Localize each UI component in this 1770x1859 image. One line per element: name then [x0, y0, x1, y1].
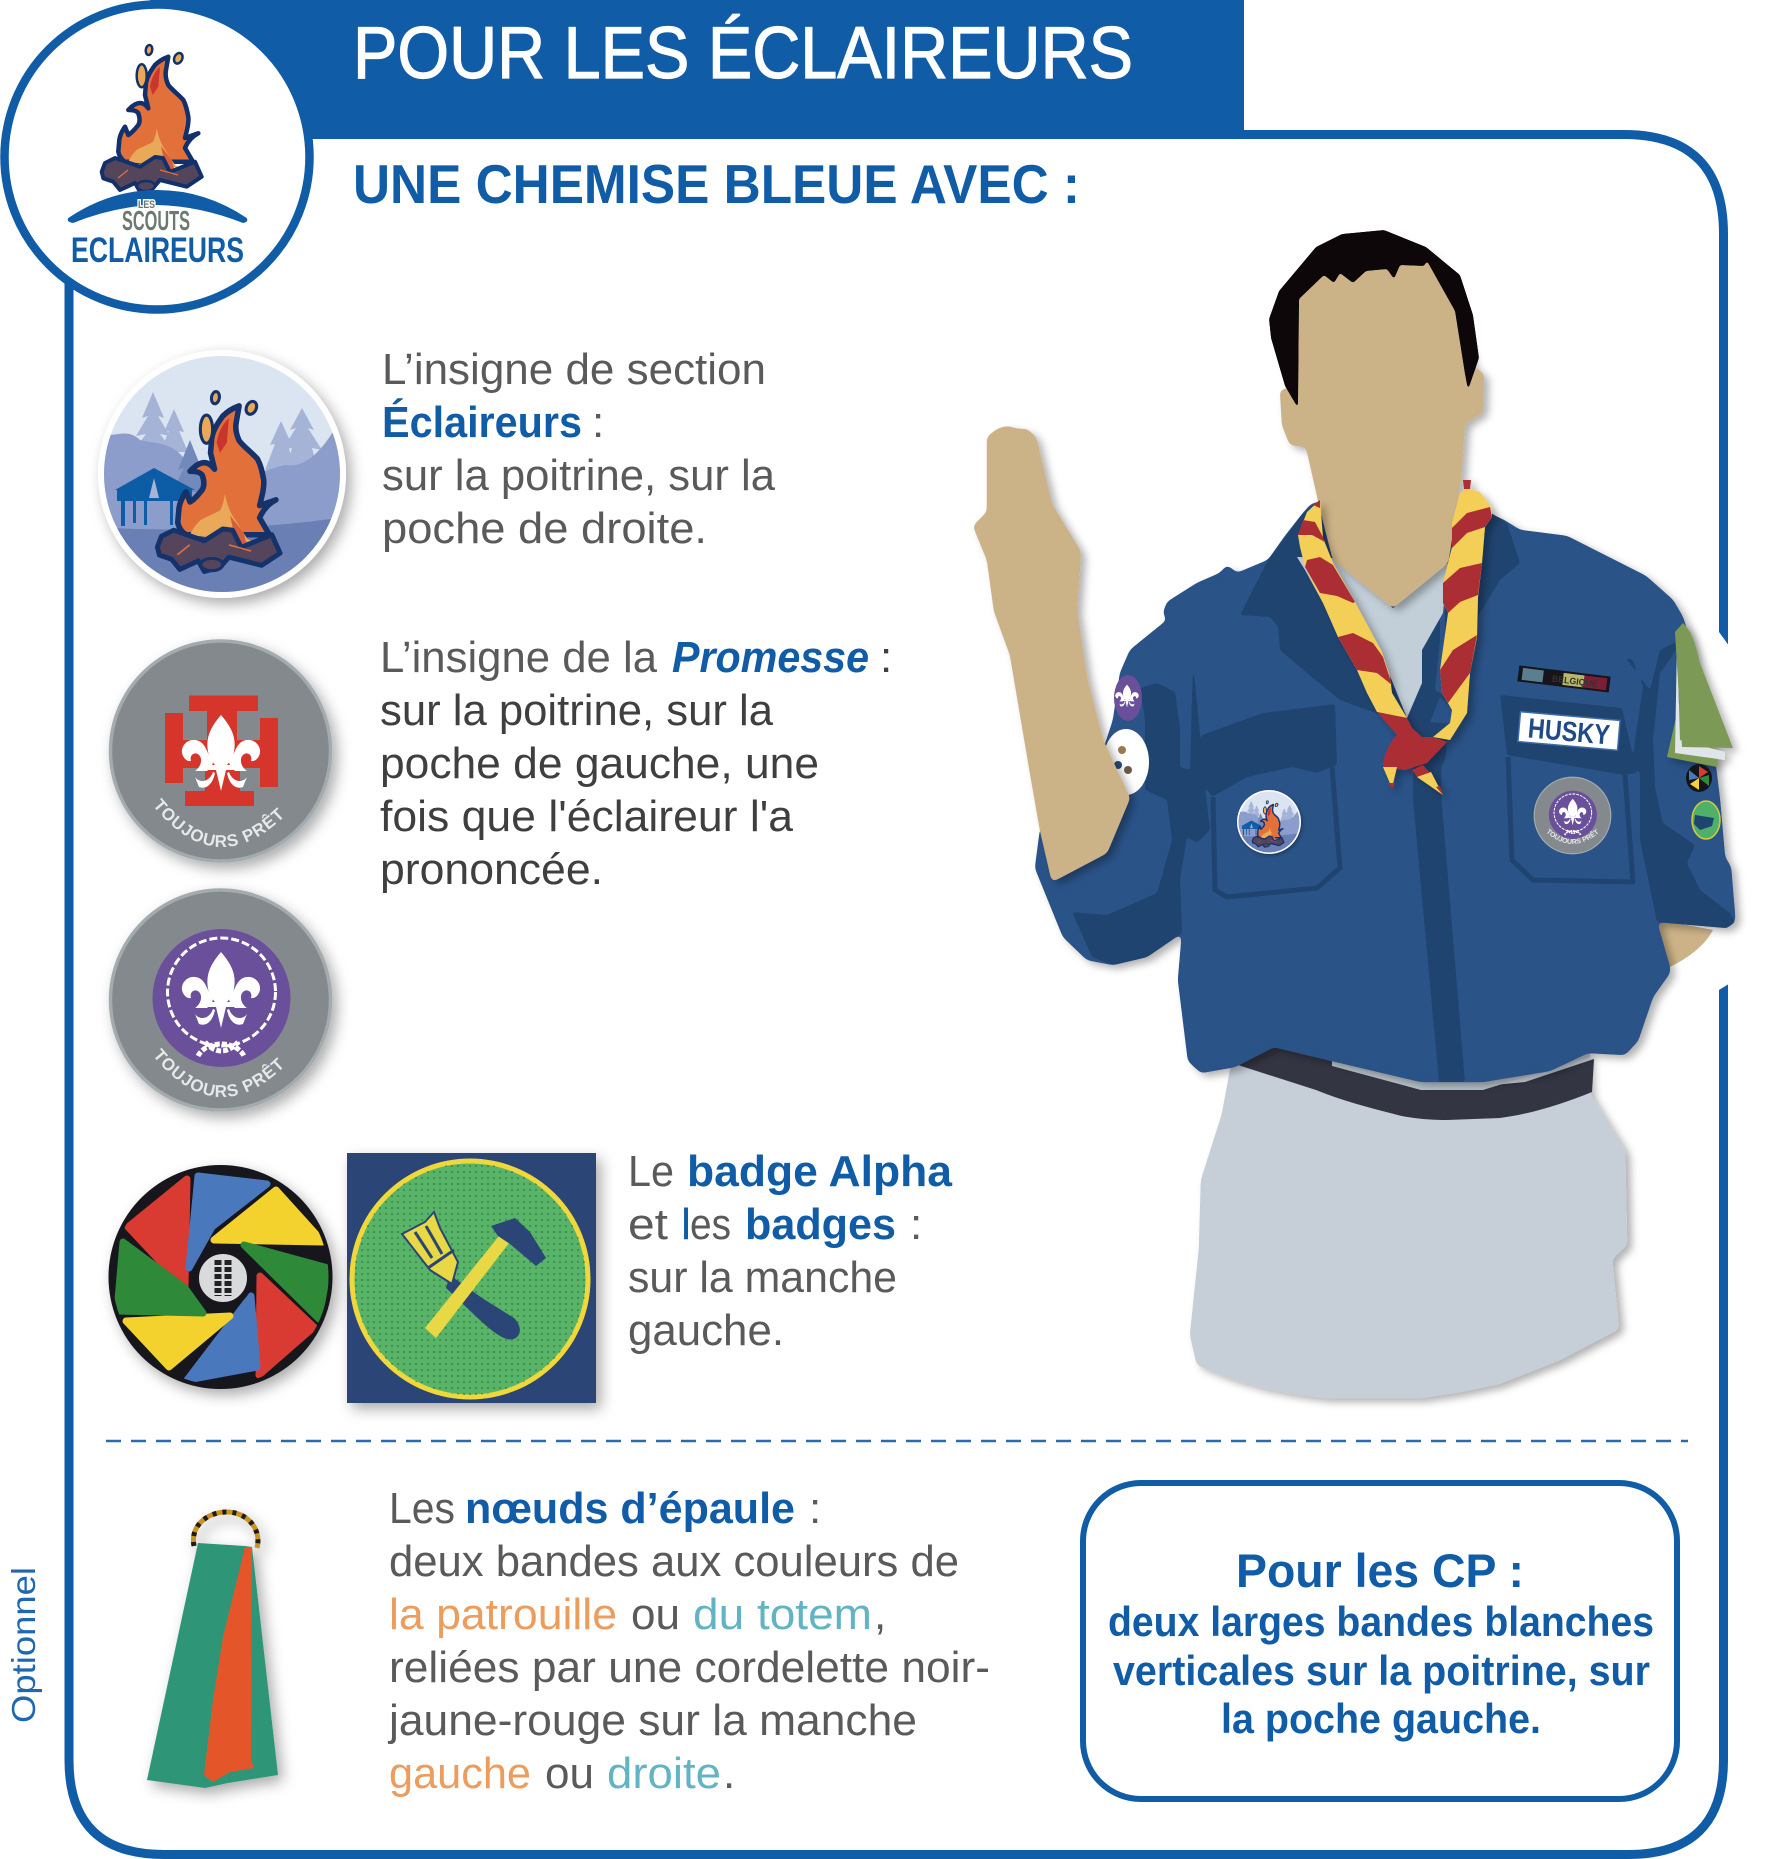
badge: Promesse, croix rouge: TOUJOURS PRÊT	[155, 798, 282, 847]
title banner	[150, 0, 1244, 139]
text: insigne de section: :	[592, 398, 604, 447]
logo: Les Scouts Éclaireurs: SCOUTS	[122, 205, 190, 236]
text: nœuds d'épaule: la patrouille	[389, 1590, 617, 1639]
sleeve badges	[1686, 764, 1720, 839]
small section badge	[1235, 790, 1301, 857]
light wedge inside the neckerchief loop	[1430, 697, 1452, 724]
text: nœuds d'épaule: deux bandes aux couleurs de	[389, 1537, 959, 1586]
text: nœuds d'épaule: :	[809, 1484, 821, 1533]
text: insigne de la Promesse: Promesse	[672, 633, 869, 682]
text: insigne de section: sur la poitrine, sur la	[382, 451, 776, 500]
text: insigne de section	[382, 345, 776, 553]
left arm white badge	[1103, 729, 1149, 795]
hair	[1269, 230, 1479, 408]
text: badge Alpha et badges: badge Alpha	[687, 1147, 953, 1196]
text: insigne de la Promesse: fois que l'éclaireur l'a	[380, 792, 794, 841]
shoulder cloth	[1667, 623, 1733, 767]
illustration: scout en uniforme	[974, 230, 1744, 1407]
text: badge Alpha et badges: l	[681, 1200, 691, 1249]
text: insigne de la Promesse: poche de gauche, une	[380, 739, 819, 788]
text: nœuds d'épaule: nœuds d’épaule	[465, 1484, 795, 1533]
text: insigne de la Promesse: sur la poitrine, sur la	[380, 686, 774, 735]
text: badge Alpha et badges: :	[910, 1200, 922, 1249]
text: badge Alpha et badges: gauche.	[628, 1306, 784, 1355]
callout: pour les CP: verticales sur la poitrine, sur	[1113, 1647, 1650, 1694]
badge: Promesse, mauve	[106, 886, 346, 1126]
logo: Les Scouts Éclaireurs: LES	[138, 199, 155, 211]
small promise badge	[1534, 776, 1612, 854]
left arm purple badge	[1114, 675, 1142, 721]
text: insigne de section: Éclaireurs	[382, 397, 582, 447]
badge: Promesse, mauve: TOUJOURS PRÊT	[155, 1048, 282, 1097]
name tape: HUSKY	[1527, 712, 1611, 751]
dashed separator	[106, 1440, 1688, 1442]
text: nœuds d'épaule: Les	[389, 1484, 455, 1533]
illustration: nœuds d'épaule	[147, 1512, 278, 1788]
logo: Les Scouts Éclaireurs: ECLAIREURS	[71, 231, 244, 270]
title banner: POUR LES ÉCLAIREURS	[353, 13, 1133, 94]
text: nœuds d'épaule: .	[723, 1749, 735, 1798]
callout: pour les CP	[1083, 1483, 1677, 1799]
small promise badge: TOUJOURS PRÊT	[1547, 828, 1598, 844]
text: badge Alpha et badges: Le	[628, 1147, 674, 1196]
text: badge Alpha et badges: et	[628, 1200, 668, 1249]
heading: une chemise bleue: UNE CHEMISE BLEUE AVEC :	[353, 153, 1080, 215]
undershirt strip at the waist	[1332, 1050, 1590, 1090]
text: insigne de la Promesse: :	[880, 633, 892, 682]
text: nœuds d'épaule: gauche	[389, 1749, 531, 1798]
right hand	[1650, 918, 1713, 967]
badge: section Éclaireurs	[90, 350, 346, 610]
shirt shading	[1072, 500, 1735, 1082]
text: insigne de la Promesse: L’insigne de la	[380, 633, 658, 682]
neckerchief	[1298, 480, 1492, 795]
text: nœuds d'épaule: du totem	[693, 1590, 872, 1639]
text: badge Alpha et badges	[628, 1147, 953, 1355]
belt	[1238, 1047, 1594, 1120]
face and neck	[1280, 250, 1484, 608]
text: nœuds d'épaule: ou	[631, 1590, 680, 1639]
text: insigne de la Promesse	[380, 633, 892, 894]
text: nœuds d'épaule: ,	[874, 1590, 886, 1639]
badge: Promesse, croix rouge	[106, 637, 346, 877]
raised arm	[973, 426, 1130, 882]
text: insigne de la Promesse: prononcée.	[380, 845, 603, 894]
text: nœuds d'épaule: jaune-rouge sur la manche	[387, 1696, 917, 1745]
logo: Les Scouts Éclaireurs	[4, 4, 310, 310]
callout: pour les CP: Pour les CP :	[1236, 1544, 1524, 1597]
badge: marteau et pinceau	[347, 1153, 596, 1403]
pocket outlines	[1213, 757, 1633, 897]
text: nœuds d'épaule: reliées par une cordelette noir-	[389, 1643, 990, 1692]
badge: Alpha	[108, 1165, 332, 1389]
text: insigne de section: poche de droite.	[382, 504, 707, 553]
shorts	[1190, 1053, 1627, 1398]
callout: pour les CP: la poche gauche.	[1221, 1695, 1541, 1742]
text: badge Alpha et badges: sur la manche	[628, 1253, 897, 1302]
callout: pour les CP: deux larges bandes blanches	[1108, 1598, 1654, 1645]
Belgique strip	[1517, 665, 1611, 693]
text: badge Alpha et badges: badges	[745, 1200, 896, 1249]
text: nœuds d'épaule: ou	[545, 1749, 594, 1798]
text: nœuds d'épaule	[387, 1484, 990, 1798]
Belgique strip: BELGIQUE	[1551, 674, 1598, 689]
shirt	[1035, 480, 1735, 1082]
label: Optionnel: Optionnel	[5, 1567, 42, 1723]
text: badge Alpha et badges: es	[690, 1200, 731, 1249]
undershirt	[1297, 557, 1448, 718]
text: nœuds d'épaule: droite	[607, 1749, 721, 1798]
text: insigne de section: L’insigne de section	[382, 345, 766, 394]
